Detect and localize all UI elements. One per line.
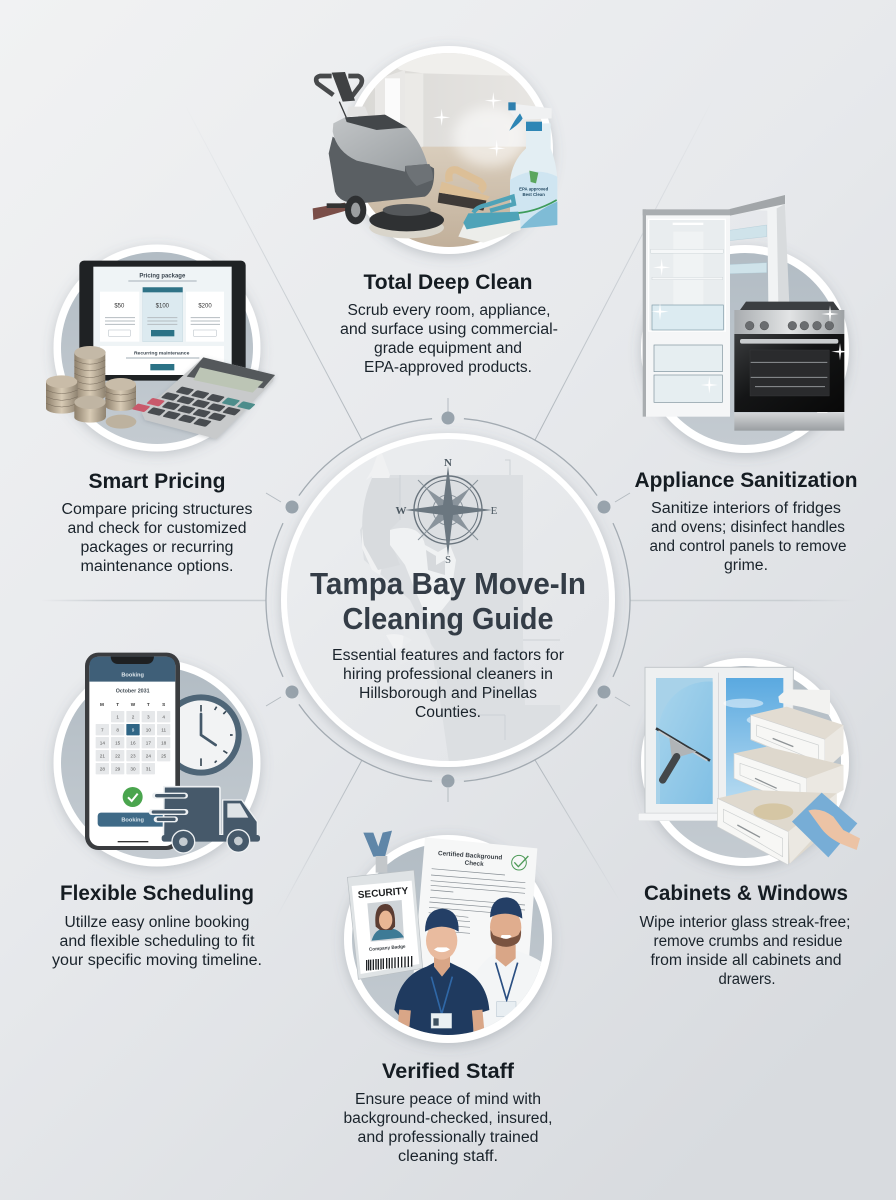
phone: 21 [100, 754, 105, 759]
body text: grade equipment and [374, 340, 522, 357]
body text: Ensure peace of mind with [355, 1091, 541, 1108]
phone: 7 [101, 728, 104, 733]
body text: and surface using commercial- [340, 321, 558, 338]
handle [316, 76, 362, 97]
compass letters: S [445, 554, 451, 566]
phone: 23 [130, 754, 136, 759]
cabinet [643, 209, 730, 417]
central hub [266, 412, 630, 788]
phone: 15 [115, 741, 121, 746]
phone: 8 [116, 728, 119, 733]
cloth and hand [792, 793, 860, 857]
phone: 29 [115, 767, 121, 772]
phone [85, 653, 180, 850]
compass letters: N [444, 457, 452, 469]
outer ring [266, 419, 630, 781]
body text [640, 914, 850, 988]
ring nodes [286, 412, 610, 788]
body text: packages or recurring [80, 539, 234, 556]
body text: cleaning staff. [398, 1148, 498, 1165]
subtitle: Hillsborough and Pinellas [359, 685, 537, 702]
wheel and deck [345, 196, 366, 224]
phone: 16 [130, 741, 136, 746]
body text [344, 1091, 552, 1165]
icon: window, squeegee and drawers [638, 658, 860, 866]
white disc [281, 433, 615, 767]
ID badge [347, 831, 423, 979]
spray bottle: EPA approved [519, 187, 549, 192]
certificate [413, 837, 537, 990]
body text [340, 302, 558, 376]
phone: 28 [100, 767, 105, 772]
body text: maintenance options. [80, 558, 234, 575]
panel: verified staff [344, 831, 552, 1165]
phone: 25 [161, 754, 167, 759]
body text: Compare pricing structures [62, 501, 253, 518]
panel: flexible scheduling [52, 653, 262, 969]
phone: M [100, 702, 104, 707]
subtitle [332, 647, 564, 721]
body text: remove crumbs and residue [654, 933, 842, 950]
compass letters: W [396, 505, 406, 517]
body text: drawers. [718, 971, 776, 988]
phone: S [162, 702, 165, 707]
certificate: Check [464, 860, 484, 868]
phone: 4 [162, 715, 165, 720]
phone: 30 [130, 767, 136, 772]
county map [360, 448, 564, 770]
body text: EPA-approved products. [364, 359, 532, 376]
subtitle: hiring professional cleaners in [343, 666, 553, 683]
door [728, 195, 788, 305]
body text: and ovens; disinfect handles [651, 519, 845, 536]
body text [52, 914, 262, 969]
body text: Wipe interior glass streak-free; [640, 914, 850, 931]
phone: 10 [146, 728, 151, 733]
phone: 9 [132, 728, 135, 733]
connector spokes [40, 95, 856, 920]
phone: 11 [161, 728, 166, 733]
body text: and check for customized [68, 520, 246, 537]
body text: Scrub every room, appliance, [348, 302, 550, 319]
phone: 14 [100, 741, 105, 746]
body text: from inside all cabinets and [650, 952, 842, 969]
phone: T [116, 702, 119, 707]
compass letters [396, 457, 498, 566]
phone: 18 [161, 741, 167, 746]
main title: Tampa Bay Move-In [310, 566, 586, 601]
window [638, 667, 793, 821]
body text: and professionally trained [358, 1129, 538, 1146]
panel: smart pricing [46, 244, 275, 575]
squeegee tool [656, 728, 710, 780]
oven [740, 302, 839, 310]
phone: 22 [115, 754, 121, 759]
panel: cabinets and windows [638, 658, 860, 988]
calculator [132, 357, 275, 439]
delivery truck [152, 787, 260, 853]
icon: tablet, coins and calculator: $100 [156, 304, 170, 310]
body text: and control panels to remove [650, 538, 846, 555]
icon: tablet, coins and calculator [46, 244, 275, 452]
main title [310, 566, 586, 636]
woman [394, 909, 489, 1043]
teal brush [458, 197, 521, 243]
phone: 3 [147, 715, 150, 720]
icon: open fridge and oven [641, 195, 849, 453]
compass letters: E [491, 505, 498, 517]
icon: tablet, coins and calculator: Pricing package [139, 273, 186, 279]
body text: Sanitize interiors of fridges [651, 500, 841, 517]
clock [160, 694, 242, 776]
panel: total deep clean [313, 46, 558, 376]
phone: T [147, 702, 150, 707]
ID badge: SECURITY [357, 886, 409, 901]
phone: Booking [121, 673, 145, 679]
compass rose [396, 457, 498, 566]
heading: Cabinets & Windows [644, 882, 848, 905]
body text [650, 500, 846, 574]
phone: 31 [146, 767, 151, 772]
body text: and flexible scheduling to fit [60, 933, 255, 950]
wood brush [438, 170, 490, 211]
body text: your specific moving timeline. [52, 952, 262, 969]
phone: 1 [116, 715, 119, 720]
heading: Smart Pricing [88, 470, 226, 493]
panel: appliance sanitization [634, 195, 858, 574]
icon: tablet, coins and calculator: $50 [114, 304, 125, 310]
heading: Verified Staff [382, 1060, 515, 1083]
certificate: Certified Background [438, 850, 503, 862]
icon: phone calendar, clock and truck [54, 653, 260, 866]
coin stacks [46, 346, 136, 429]
phone: W [131, 702, 136, 707]
heading: Flexible Scheduling [60, 882, 254, 905]
phone: 24 [146, 754, 151, 759]
subtitle: Counties. [415, 704, 481, 721]
body text: background-checked, insured, [344, 1110, 552, 1127]
heading: Appliance Sanitization [634, 469, 858, 492]
phone: October 2031 [116, 689, 150, 695]
squeegee [313, 203, 347, 220]
ID badge: Company Badge [369, 944, 406, 952]
icon: tablet, coins and calculator: Recurring maintenance [134, 350, 190, 356]
heading: Total Deep Clean [364, 271, 532, 294]
phone: 2 [132, 715, 135, 720]
spray bottle [508, 102, 557, 228]
icon: tablet, coins and calculator: $200 [198, 304, 212, 310]
subtitle: Essential features and factors for [332, 647, 564, 664]
phone: 17 [146, 741, 151, 746]
body text: Utillze easy online booking [64, 914, 250, 931]
icon: scrubber, room and cleaning products [313, 46, 557, 254]
machine body [329, 137, 434, 203]
body text: grime. [724, 557, 768, 574]
main title: Cleaning Guide [342, 601, 554, 636]
body text [62, 501, 253, 575]
icon: badge, certificate and staff [344, 831, 552, 1043]
man [481, 897, 541, 1028]
drawers [717, 689, 843, 865]
phone: Booking [121, 818, 145, 824]
spray bottle: Best Clean [522, 192, 545, 197]
